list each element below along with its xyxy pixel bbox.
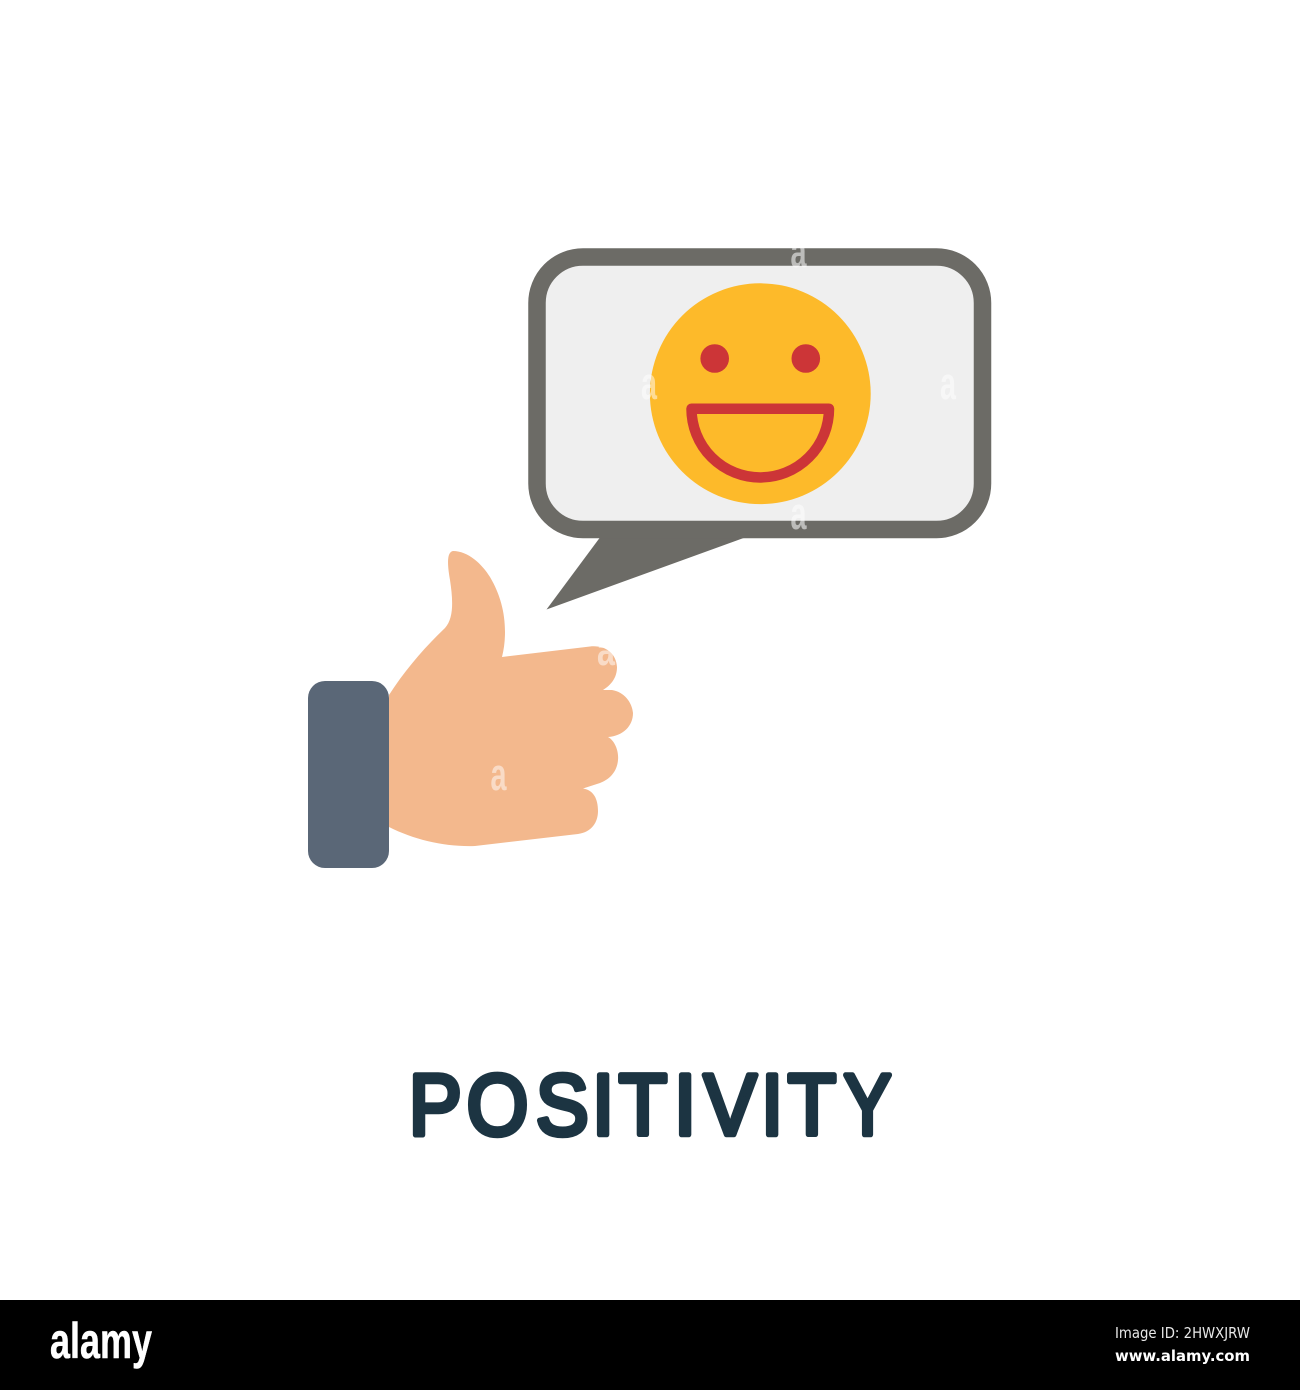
alamy logo: alamy xyxy=(50,1313,152,1369)
watermark marks on hand: a xyxy=(490,749,507,800)
right eye xyxy=(792,344,820,373)
watermark marks on bubble: a xyxy=(641,358,658,409)
speech bubble tail xyxy=(546,532,745,610)
title: Y xyxy=(844,1056,891,1153)
watermark marks on bubble: a xyxy=(790,488,807,539)
image id: Image ID: 2HWXJRW xyxy=(1115,1324,1250,1342)
speech bubble body xyxy=(537,257,982,530)
sleeve cuff xyxy=(308,681,389,868)
smile xyxy=(692,409,829,477)
watermark marks on hand: a xyxy=(597,624,616,675)
footer bar xyxy=(0,1300,1300,1390)
watermark marks on bubble xyxy=(641,226,957,539)
watermark marks on bubble: a xyxy=(940,358,957,409)
website: www.alamy.com xyxy=(1115,1347,1250,1365)
watermark marks on hand xyxy=(490,624,616,800)
title: POSITIVIT xyxy=(409,1056,836,1153)
icon: thumbs up hand xyxy=(308,551,633,868)
icon: smiley face xyxy=(650,283,871,504)
face xyxy=(650,283,871,504)
left eye xyxy=(700,344,729,373)
watermark marks on bubble: a xyxy=(790,226,807,277)
hand xyxy=(389,551,633,846)
icon: speech bubble with smiley xyxy=(537,226,982,610)
